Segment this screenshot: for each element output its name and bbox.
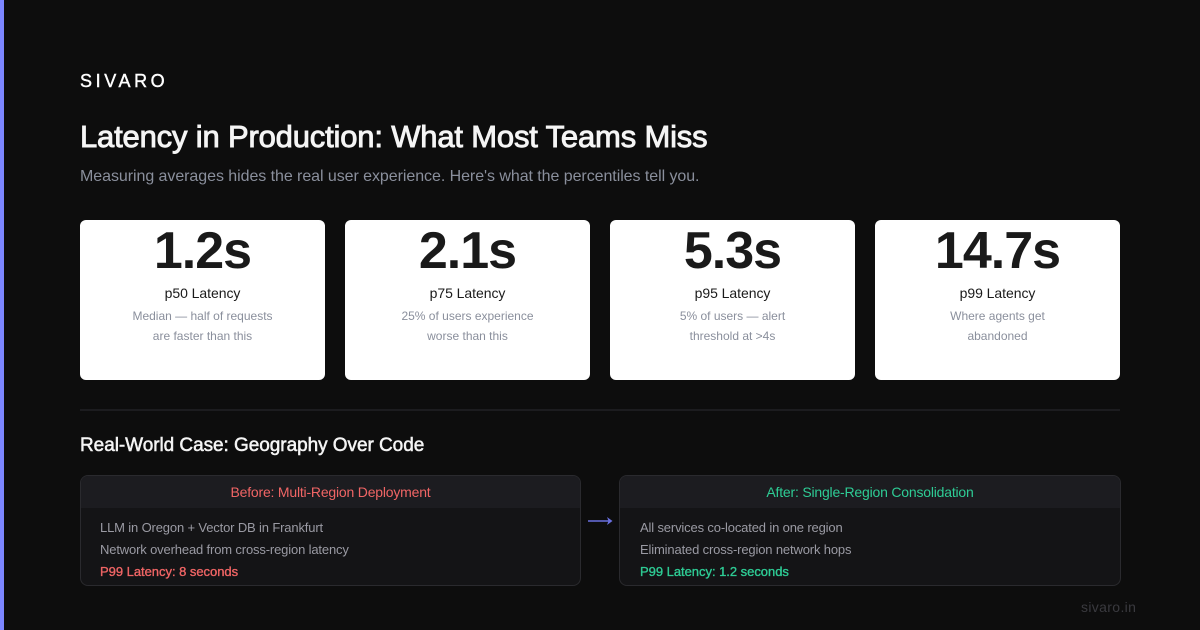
subtitle: Measuring averages hides the real user experience. Here's what the percentiles tell you. <box>80 168 699 185</box>
stat card: p75 <box>345 220 590 380</box>
before result: P99 Latency: 8 seconds <box>100 564 238 579</box>
before heading: Before: Multi-Region Deployment <box>230 484 430 500</box>
stat card: p99: abandoned <box>967 329 1028 343</box>
stat card: p99: Where agents get <box>950 309 1045 323</box>
stat card: p95: p95 Latency <box>695 285 770 301</box>
stat card: p99: 14.7s <box>935 222 1060 280</box>
title: Latency in Production: What Most Teams Miss <box>80 119 707 154</box>
stat card: p75: 2.1s <box>419 222 516 280</box>
panel: after <box>619 475 1121 586</box>
panel: after: Eliminated cross-region network hops <box>640 542 851 557</box>
stat card: p75: 25% of users experience <box>401 309 534 323</box>
stat card: p50: Median — half of requests <box>132 309 273 323</box>
before details: LLM in Oregon + Vector DB in Frankfurt <box>100 520 323 535</box>
panel: before <box>80 475 581 586</box>
stat card: p99 <box>875 220 1120 380</box>
stat card: p95: 5% of users — alert <box>680 309 785 323</box>
after result: P99 Latency: 1.2 seconds <box>640 564 789 579</box>
stat card: p50: 1.2s <box>154 222 251 280</box>
stat card: p95 <box>610 220 855 380</box>
before heading <box>81 476 580 508</box>
arrow <box>588 517 612 525</box>
panel: before: Network overhead from cross-region latency <box>100 542 349 557</box>
brand logo: SIVARO <box>80 71 168 91</box>
stat card: p95: threshold at >4s <box>690 329 775 343</box>
stat card: p99: p99 Latency <box>960 285 1035 301</box>
accent bar <box>0 0 4 630</box>
after heading <box>620 476 1120 508</box>
stat card: p50: p50 Latency <box>165 285 240 301</box>
footer url: sivaro.in <box>1081 599 1136 615</box>
stat card: p75: worse than this <box>427 329 508 343</box>
stat card: p75: p75 Latency <box>430 285 505 301</box>
stat card: p95: 5.3s <box>684 222 781 280</box>
stat card: p50: are faster than this <box>153 329 252 343</box>
section heading: Real-World Case: Geography Over Code <box>80 435 424 456</box>
stat card: p50 <box>80 220 325 380</box>
after details: All services co-located in one region <box>640 520 843 535</box>
after heading: After: Single-Region Consolidation <box>766 484 974 500</box>
